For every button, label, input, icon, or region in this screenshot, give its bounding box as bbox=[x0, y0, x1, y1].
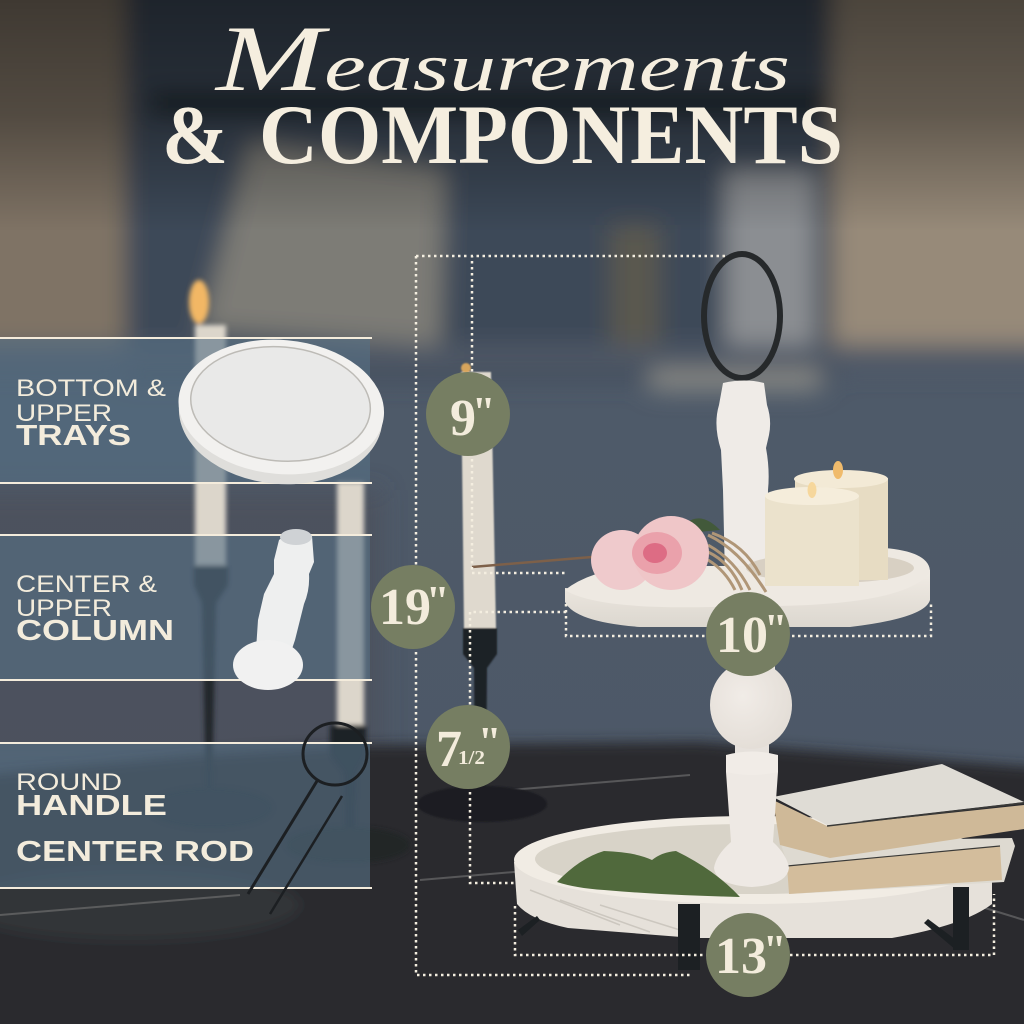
label: bottom and upper trays: TRAYS bbox=[16, 420, 131, 452]
badge: 9 inch: 9 bbox=[450, 390, 476, 447]
badge: 19 inch bbox=[371, 565, 455, 649]
lower book bbox=[780, 838, 1015, 894]
pampas sprig bbox=[708, 533, 766, 592]
label: round handle and center rod: CENTER ROD bbox=[16, 836, 254, 868]
icon: tray feet bbox=[518, 887, 969, 970]
icon: round handle and center rod bbox=[248, 723, 367, 914]
upper book bbox=[773, 764, 1024, 858]
badge: 13 inch: " bbox=[763, 928, 786, 974]
icon: green leaf bbox=[557, 851, 740, 897]
badge: 19 inch: " bbox=[426, 579, 449, 625]
center candle bbox=[417, 363, 547, 822]
label: center and upper column: COLUMN bbox=[16, 615, 174, 647]
rose bbox=[591, 516, 709, 590]
dark marble table bbox=[0, 742, 1024, 1024]
badge: 19 inch: 19 bbox=[379, 579, 431, 636]
badge: 10 inch: 10 bbox=[716, 607, 768, 664]
label: round handle and center rod bbox=[16, 769, 254, 868]
title line: & Components: & bbox=[162, 89, 228, 182]
upper column bbox=[716, 380, 770, 578]
dimension lines bbox=[416, 256, 994, 975]
badge: 7 and a half inch: 7 bbox=[436, 721, 462, 778]
badge: 10 inch bbox=[706, 592, 790, 676]
label: round handle and center rod: HANDLE bbox=[16, 790, 167, 822]
label: center and upper column bbox=[16, 571, 174, 647]
pillar candles bbox=[765, 461, 888, 586]
label: bottom and upper trays bbox=[16, 375, 166, 452]
badge: 13 inch bbox=[706, 913, 790, 997]
upper tray bbox=[565, 548, 930, 627]
panel: bottom and upper trays bbox=[0, 337, 372, 484]
icon: white tray bbox=[172, 331, 390, 493]
title line: Measurements: M easurements bbox=[213, 7, 790, 111]
ring handle bbox=[704, 254, 780, 378]
label: bottom and upper trays: UPPER bbox=[16, 400, 112, 427]
badge: 13 inch: 13 bbox=[715, 928, 767, 985]
lower tray bbox=[514, 816, 992, 970]
rose stem bbox=[472, 557, 592, 567]
icon: white column bbox=[233, 529, 314, 690]
label: round handle and center rod: ROUND bbox=[16, 769, 122, 796]
badge: 10 inch: " bbox=[764, 607, 787, 653]
label: center and upper column: UPPER bbox=[16, 595, 112, 622]
label: center and upper column: CENTER & bbox=[16, 571, 157, 598]
lower column bbox=[710, 620, 792, 887]
panel: round handle and center rod bbox=[0, 742, 372, 889]
badge: 9 inch bbox=[426, 372, 510, 456]
title line: & Components: COMPONENTS bbox=[259, 88, 843, 182]
title bbox=[162, 7, 843, 182]
badge: 9 inch: " bbox=[472, 390, 495, 436]
rose leaf bbox=[688, 518, 720, 532]
panel: center and upper column bbox=[0, 534, 372, 681]
background candles bbox=[148, 280, 410, 863]
label: bottom and upper trays: BOTTOM & bbox=[16, 375, 166, 402]
badge: 7 and a half inch: 1/2 bbox=[458, 747, 485, 769]
tiered tray product bbox=[472, 254, 1024, 970]
badge: 7 and a half inch: " bbox=[478, 720, 501, 766]
badge: 7 and a half inch bbox=[426, 705, 510, 789]
